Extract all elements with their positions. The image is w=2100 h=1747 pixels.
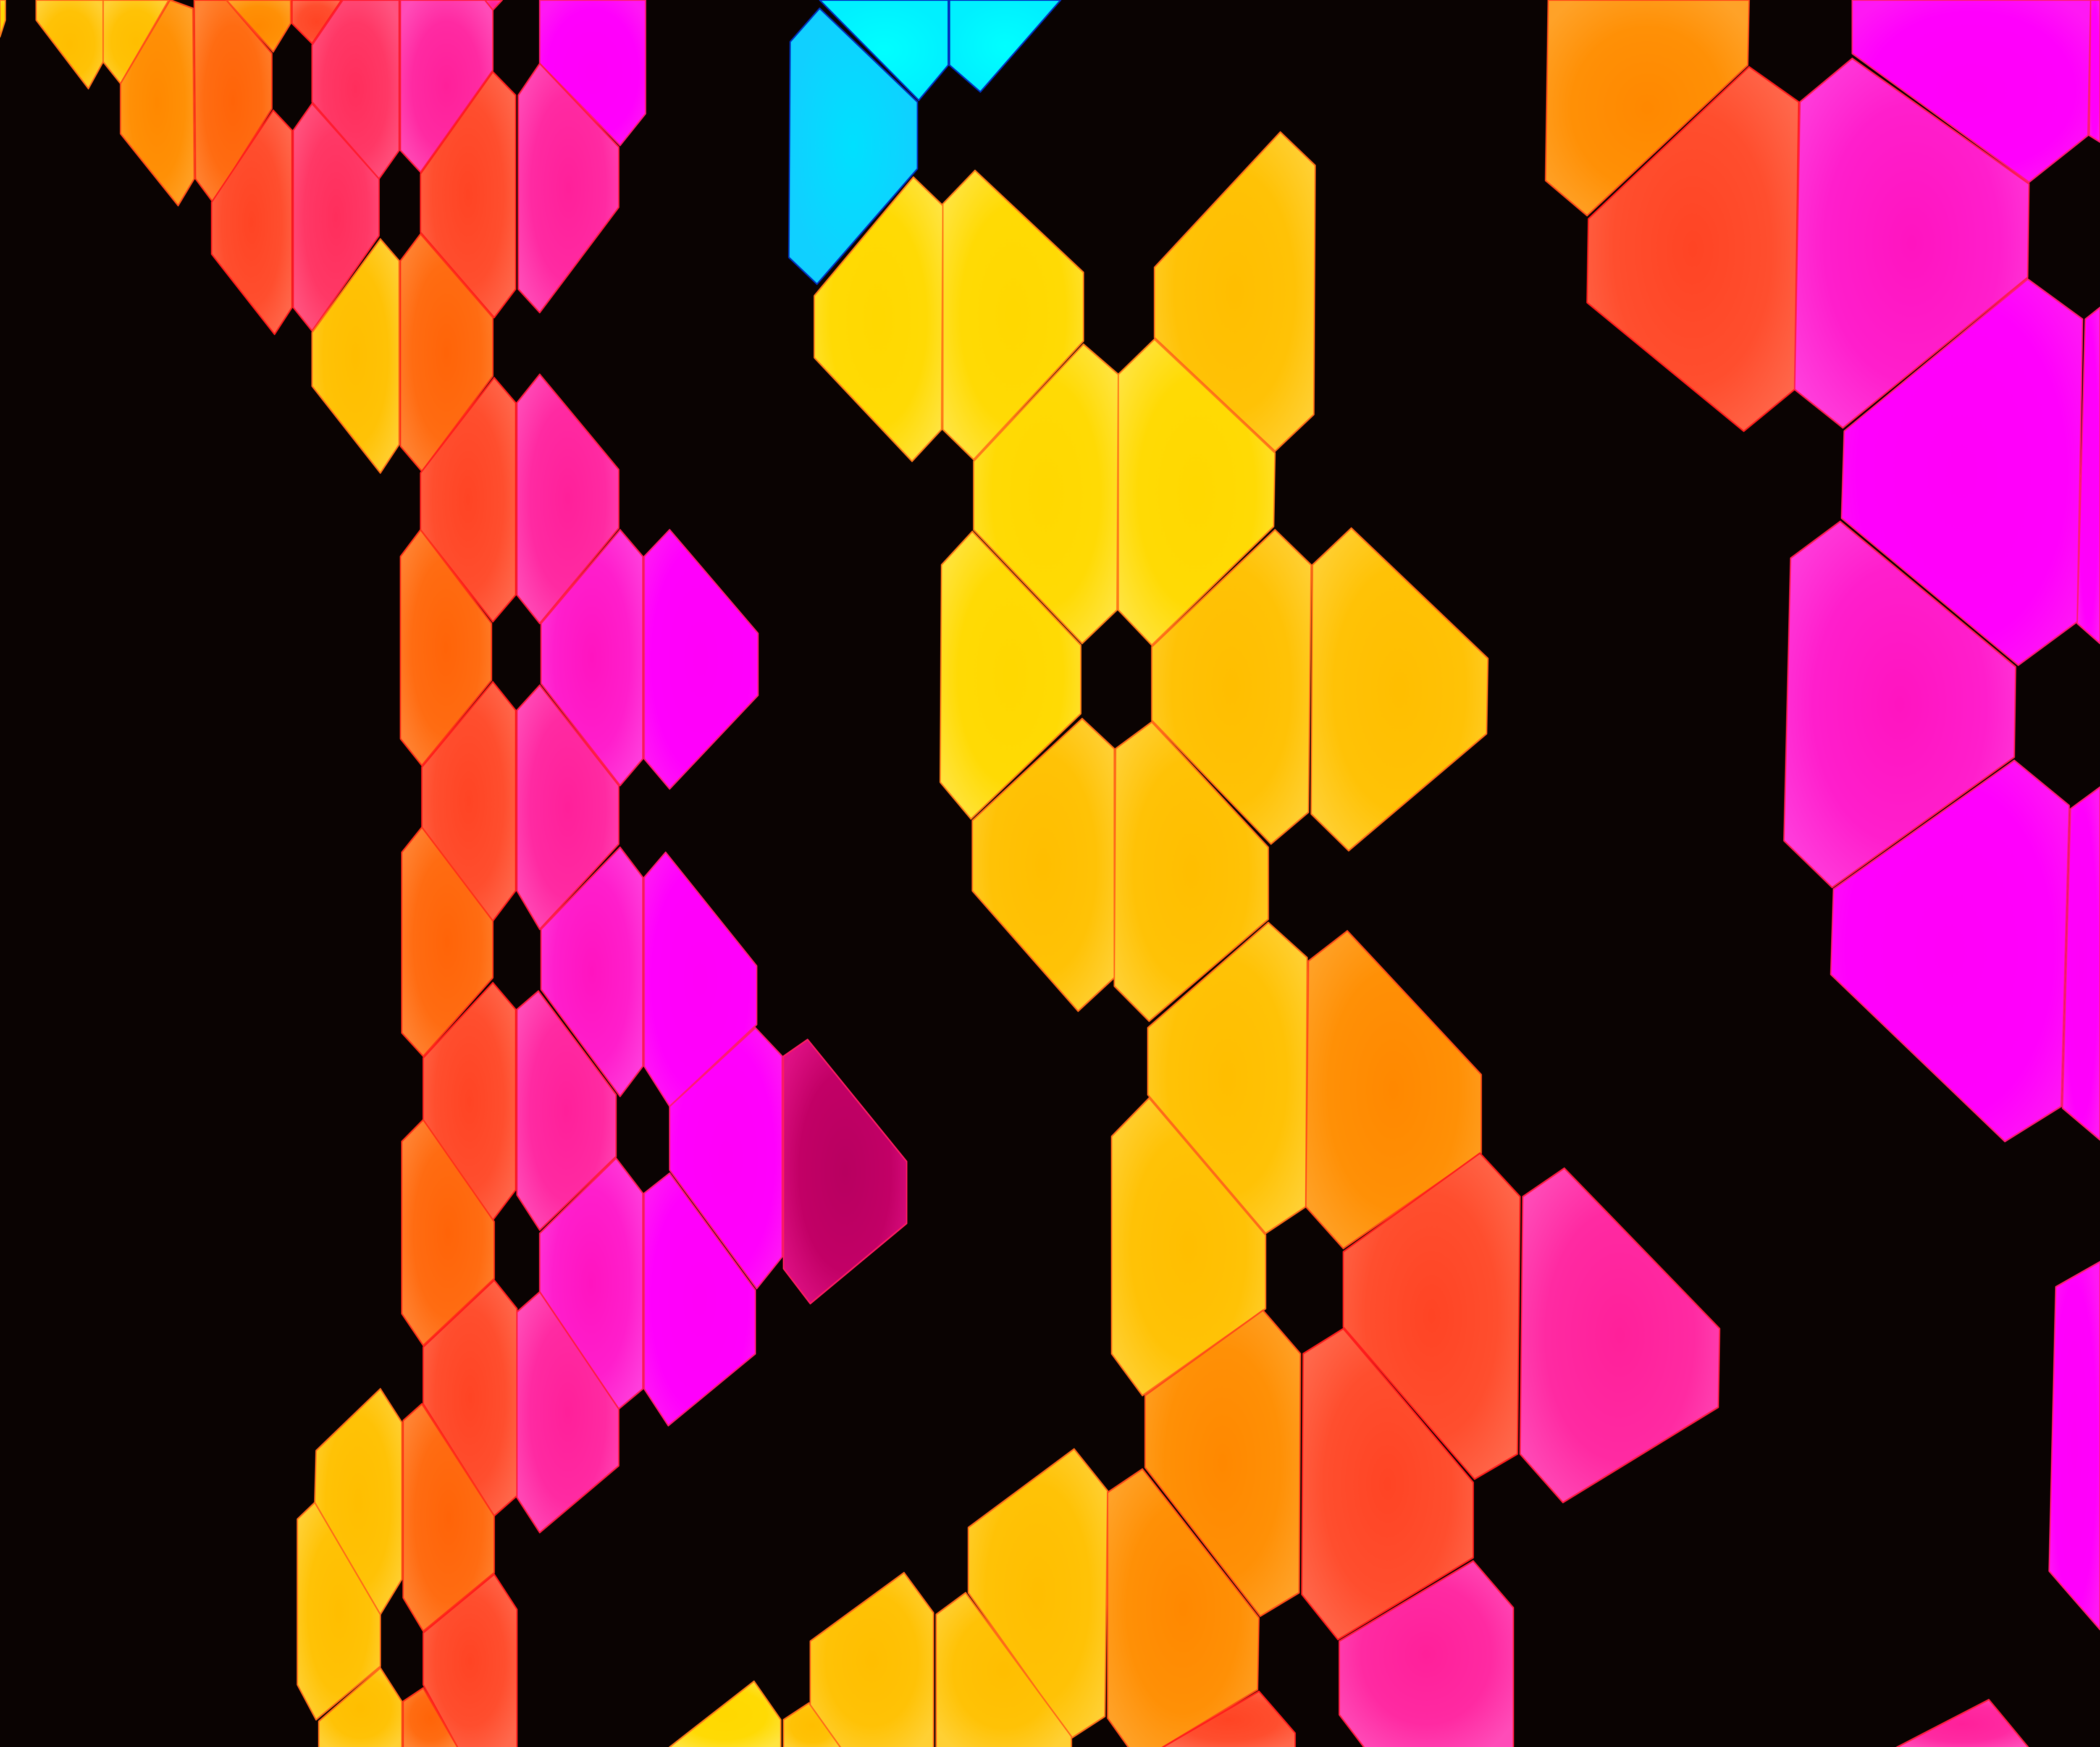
- cluster: central yellow panels: [814, 132, 1488, 1021]
- cluster: top-left panels: [0, 0, 646, 473]
- cluster: cyan panels: [789, 0, 1061, 284]
- cluster: right large panels: [1546, 0, 2100, 1747]
- cluster: lower centre amber and red panels: [668, 923, 1719, 1747]
- cluster: left column panels: [297, 374, 907, 1747]
